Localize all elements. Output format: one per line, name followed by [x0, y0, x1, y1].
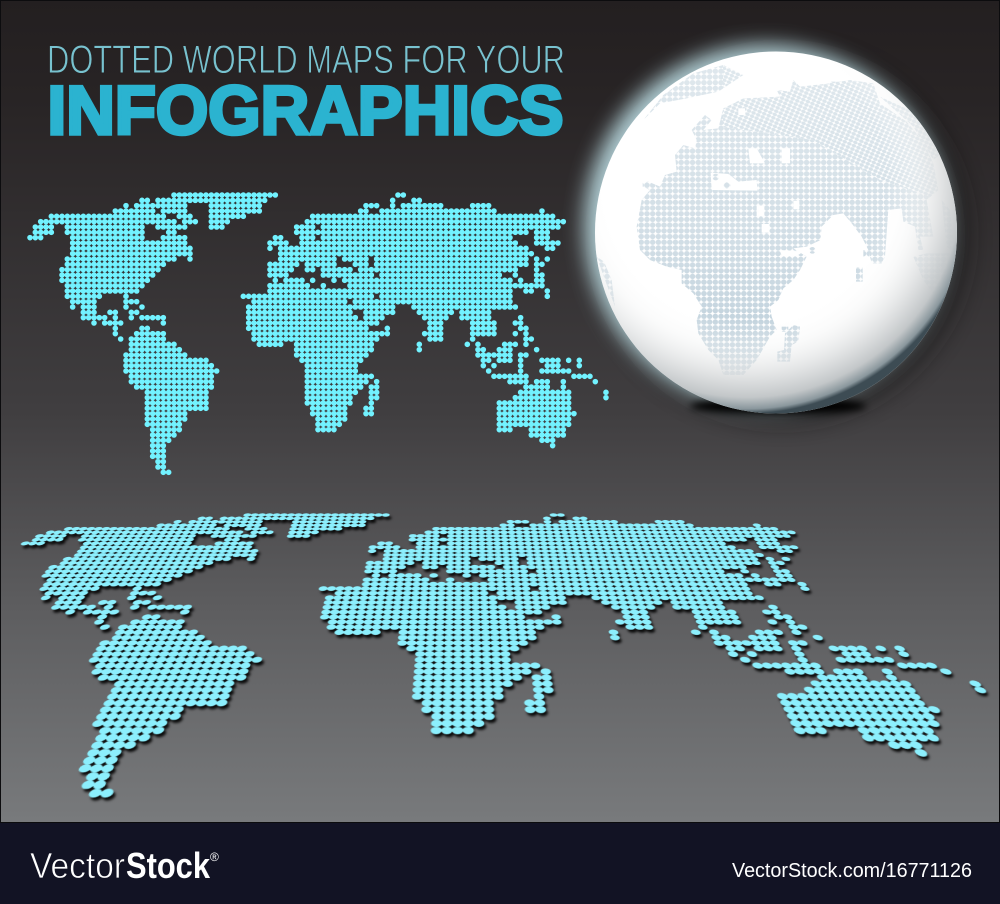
perspective dotted world map [20, 513, 990, 802]
title line 2: INFOGRAPHICS [48, 72, 564, 149]
globe ground shadow [690, 397, 866, 415]
flat dotted world map [30, 195, 606, 472]
globe dotted continents [597, 65, 940, 375]
title [47, 38, 565, 149]
globe edge shading [595, 52, 957, 414]
footer band [0, 823, 1000, 904]
globe dark halo [592, 46, 972, 426]
image id: VectorStock.com/16771126 [732, 860, 972, 882]
globe sphere [595, 52, 957, 414]
globe [560, 30, 980, 430]
title line 1: DOTTED WORLD MAPS FOR YOUR [47, 38, 565, 82]
logo [30, 845, 219, 886]
logo: Stock [126, 845, 211, 886]
logo: ® [210, 850, 219, 864]
logo: Vector [30, 845, 125, 886]
globe glow [584, 44, 948, 408]
